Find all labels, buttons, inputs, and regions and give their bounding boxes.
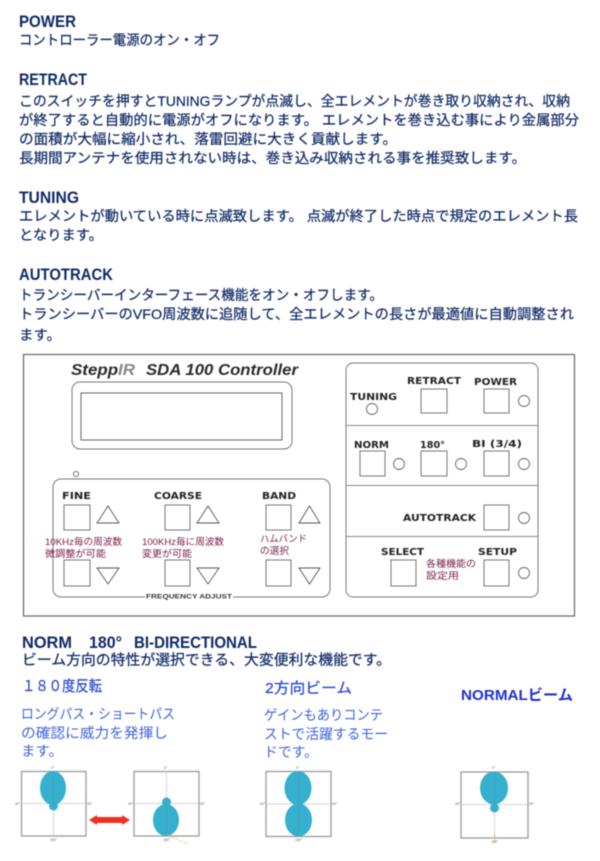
heading: AUTOTRACK: AUTOTRACK — [19, 266, 113, 284]
heading: NORM 180° BI-DIRECTIONAL: NORM — [22, 633, 72, 652]
row: select, setup: SETUP — [478, 547, 517, 558]
text: 180 description — [21, 706, 175, 759]
chart: forward beam pattern: 180° — [50, 838, 58, 842]
row: select, setup — [381, 547, 530, 586]
text: RETRACT description: このスイッチを押すとTUNINGランプが点滅し、全エレメントが巻き取り収納され、収納 — [19, 93, 570, 109]
row: norm, 180, bi — [354, 439, 530, 476]
control group: FINE: FINE — [62, 491, 91, 502]
arrow: reversal double arrow — [89, 815, 130, 825]
text: TUNING description: エレメントが動いている時に点滅致します。 点滅が終了した時点で規定のエレメント長 — [19, 208, 578, 224]
chart: bi-directional beam pattern: 180° — [295, 838, 303, 842]
chart: reversed beam pattern — [128, 766, 206, 844]
text: beam intro: ビーム方向の特性が選択できる、大変便利な機能です。 — [22, 652, 391, 669]
chart: bi-directional beam pattern — [260, 766, 338, 842]
chart: forward beam pattern: 90° — [15, 802, 21, 806]
heading: NORM 180° BI-DIRECTIONAL: 180° — [89, 633, 122, 652]
row: norm, 180, bi: 180° — [420, 440, 445, 451]
row: autotrack — [403, 505, 530, 530]
control group: COARSE — [142, 491, 224, 586]
text: bi-directional description: ストで活躍するモー — [264, 726, 388, 742]
text: AUTOTRACK description: トランシーバーインターフェース機能をオン・オフします。 — [19, 287, 383, 303]
chart: normal beam pattern: 0° — [492, 766, 496, 770]
control group: BAND: ハムバンド — [260, 534, 307, 545]
column: 180 degree reversal — [15, 678, 206, 844]
chart: normal beam pattern: 90° — [455, 802, 461, 806]
chart: forward beam pattern: 90° — [87, 802, 93, 806]
text: 180 description: ます。 — [21, 743, 63, 759]
row: norm, 180, bi: BI (3/4) — [472, 439, 522, 450]
control group: BAND — [260, 491, 320, 586]
heading: 180度反転: １８０度反転 — [22, 678, 102, 695]
control group: COARSE: 変更が可能 — [142, 548, 193, 560]
section: beam modes heading — [22, 633, 391, 669]
text: RETRACT description: 長期間アンテナを使用されない時は、巻き込み収納される事を推奨致します。 — [19, 150, 526, 166]
row: norm, 180, bi: NORM — [354, 440, 389, 451]
heading: RETRACT: RETRACT — [19, 71, 87, 89]
row: tuning, retract, power: POWER — [474, 377, 517, 388]
section: POWER — [19, 13, 220, 48]
text: RETRACT description: が終了すると自動的に電源がオフになります。 エレメントを巻き込む事により金属部分 — [19, 112, 579, 128]
chart: bi-directional beam pattern: 0° — [296, 766, 300, 770]
chart: normal beam pattern: 90° — [529, 802, 535, 806]
row: autotrack: AUTOTRACK — [403, 513, 477, 524]
text: RETRACT description: の面積が大幅に縮小され、落雷回避に大きく貢献します。 — [19, 131, 397, 147]
chart: forward beam pattern — [15, 766, 93, 842]
section: AUTOTRACK — [19, 266, 574, 343]
row: tuning, retract, power: TUNING — [350, 392, 397, 403]
row: tuning, retract, power: RETRACT — [407, 376, 461, 387]
column: bi-directional beam — [260, 680, 388, 842]
control group: COARSE: 100KHz毎に周波数 — [142, 536, 224, 548]
chart: normal beam pattern — [455, 766, 535, 844]
section: RETRACT — [19, 71, 579, 166]
row: select, setup: 各種機能の — [426, 558, 476, 570]
controller title: SteppIR — [71, 362, 135, 379]
heading: 2方向ビーム: 2方向ビーム — [265, 680, 352, 697]
row: select, setup: SELECT — [381, 547, 424, 558]
text: AUTOTRACK description: ます。 — [19, 327, 61, 343]
heading: NORMALビーム: NORMALビーム — [461, 686, 573, 704]
chart: normal beam pattern: 180° — [491, 840, 499, 844]
heading: NORM 180° BI-DIRECTIONAL: BI-DIRECTIONAL — [134, 633, 257, 652]
panel: function switches — [346, 363, 538, 597]
controller title — [71, 362, 299, 379]
row: tuning, retract, power — [350, 376, 530, 414]
text: POWER description: コントローラー電源のオン・オフ — [19, 32, 220, 48]
chart: bi-directional beam pattern: 90° — [332, 802, 338, 806]
text: bi-directional description: ドです。 — [264, 744, 318, 760]
chart: reversed beam pattern: 0° — [164, 766, 168, 770]
control group: FINE — [45, 491, 123, 586]
label: FREQUENCY ADJUST: FREQUENCY ADJUST — [146, 594, 232, 600]
panel: controller front panel — [24, 354, 574, 616]
section: TUNING — [19, 189, 578, 243]
text: bi-directional description — [264, 707, 388, 760]
control group: BAND: の選択 — [260, 545, 289, 557]
text: bi-directional description: ゲインもありコンテ — [264, 707, 383, 723]
chart: reversed beam pattern: 180° — [163, 838, 171, 842]
control group: FINE: 微調整が可能 — [45, 548, 107, 560]
chart: bi-directional beam pattern: 90° — [260, 802, 266, 806]
chart: reversed beam pattern: 90° — [200, 802, 206, 806]
column: normal beam — [455, 686, 573, 844]
heading: TUNING: TUNING — [19, 189, 79, 207]
label: FREQUENCY ADJUST — [145, 592, 233, 600]
LCD display — [72, 382, 292, 449]
text: AUTOTRACK description — [19, 287, 574, 343]
text: 180 description: ロングパス・ショートパス — [21, 706, 175, 722]
panel: frequency adjust — [45, 479, 330, 600]
row: select, setup: 設定用 — [426, 571, 459, 582]
text: 180 description: の確認に威力を発揮し — [21, 725, 168, 741]
indicator LED — [73, 471, 79, 477]
chart: forward beam pattern: 0° — [51, 766, 55, 770]
chart: reversed beam pattern: 90° — [128, 802, 134, 806]
heading: POWER: POWER — [19, 13, 76, 31]
text: TUNING description — [19, 208, 578, 243]
control group: BAND: BAND — [262, 491, 296, 502]
control group: COARSE: COARSE — [154, 491, 202, 502]
heading: NORM 180° BI-DIRECTIONAL — [22, 633, 257, 652]
controller title: SDA 100 Controller — [146, 362, 299, 379]
text: RETRACT description — [19, 93, 579, 166]
text: TUNING description: となります。 — [19, 227, 103, 243]
text: AUTOTRACK description: トランシーバーのVFO周波数に追随して、全エレメントの長さが最適値に自動調整され — [19, 306, 574, 322]
control group: FINE: 10KHz毎の周波数 — [45, 536, 123, 548]
